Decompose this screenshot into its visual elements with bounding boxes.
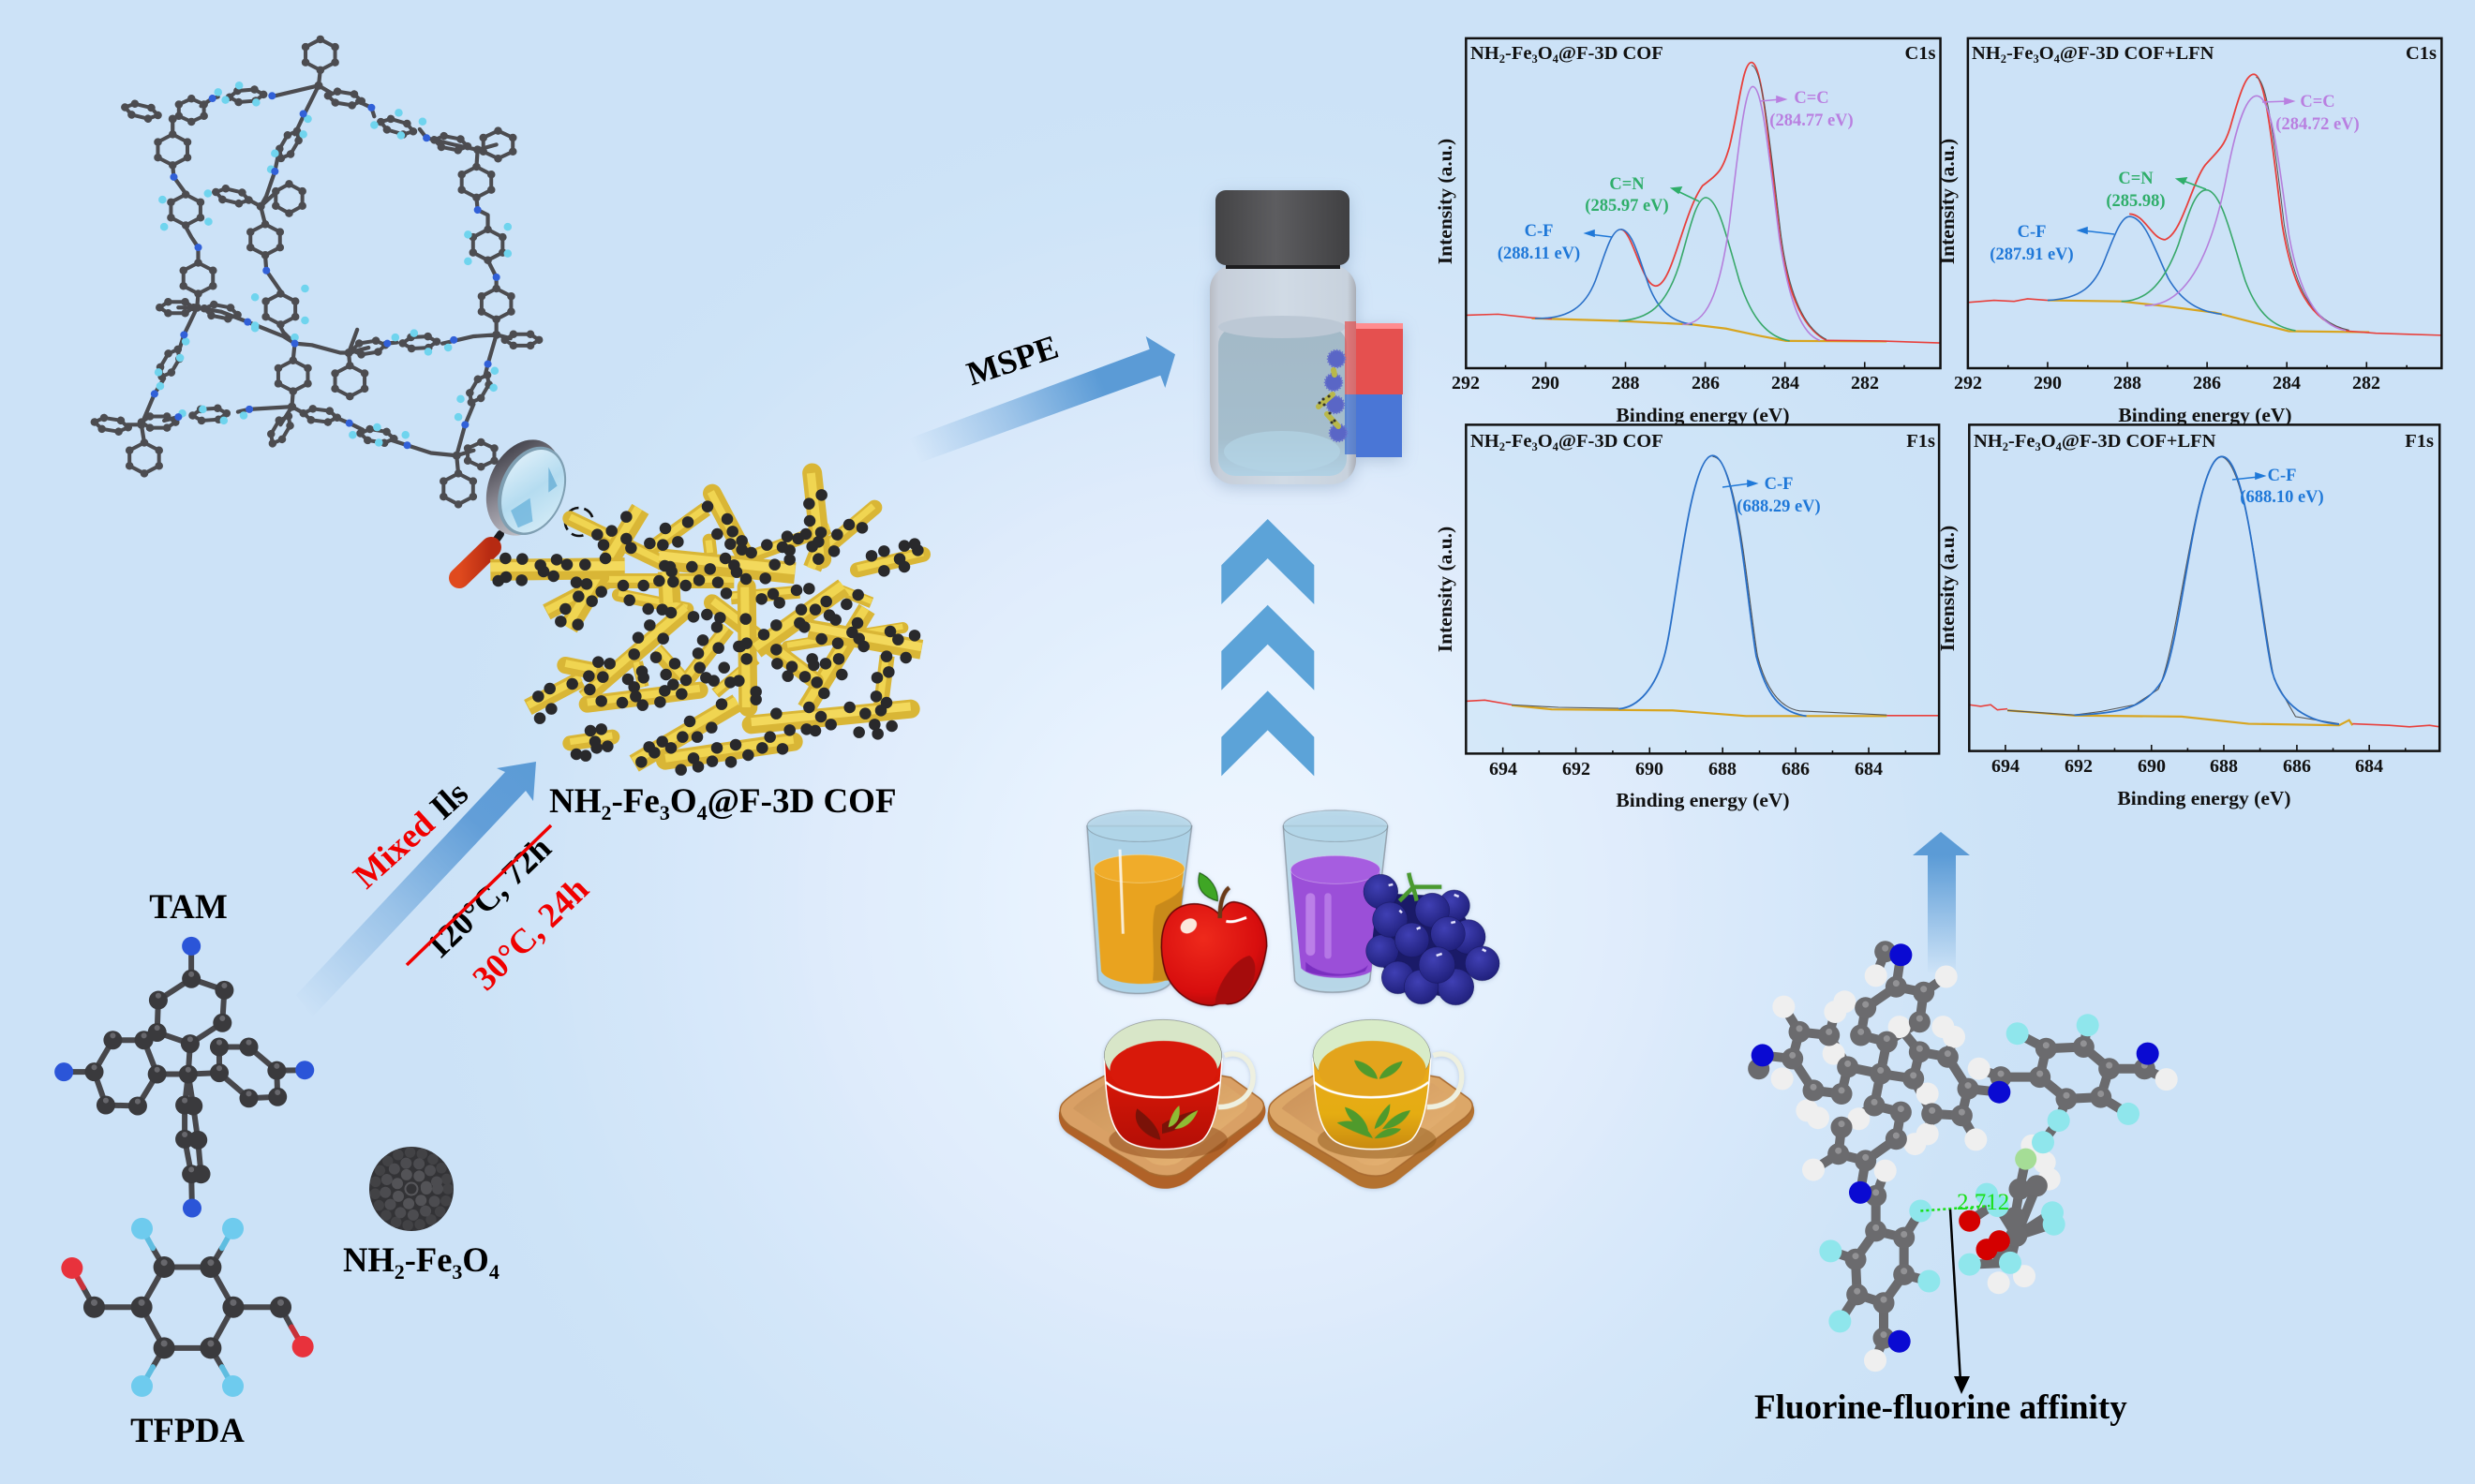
peak arrows (2079, 98, 2293, 234)
title: NH2-Fe3O4@F-3D COF label: 4 (697, 801, 708, 824)
chart text: @F-3D COF (1558, 431, 1663, 452)
chart text: (287.91 eV) (1990, 245, 2074, 264)
chart text: 282 (2352, 373, 2380, 393)
chart text (1434, 43, 1936, 426)
molecule: TAM (64, 946, 305, 1209)
title: NH2-Fe3O4@F-3D COF label: 3 (660, 801, 670, 824)
chart text: 284 (1771, 373, 1799, 393)
chart text: (688.29 eV) (1737, 497, 1821, 516)
chart text: 686 (1782, 759, 1810, 779)
title: NH2-Fe3O4@F-3D COF label: O (670, 782, 697, 821)
chart text: 694 (1991, 756, 2020, 777)
dashed zoom circle (565, 508, 593, 536)
panel: magnetic vial (1210, 190, 1403, 484)
chart text: O (1538, 43, 1553, 64)
chart text: 2 (2001, 52, 2006, 66)
chart text: 688 (1708, 759, 1737, 779)
label: NH2-Fe3O4: 3 (452, 1260, 462, 1284)
chart text: C=N (2118, 170, 2154, 188)
chart text: (285.97 eV) (1585, 197, 1669, 215)
chart text: @F-3D COF+LFN (2060, 43, 2214, 64)
chart text: 292 (1452, 373, 1480, 393)
chart text: (688.10 eV) (2240, 488, 2324, 507)
chart text: Binding energy (eV) (1616, 404, 1790, 426)
icon: apple (1161, 873, 1267, 1005)
title: Fluorine-fluorine affinity: Fluorine-fluorine affinity (1754, 1388, 2127, 1427)
peak arrow (2232, 473, 2264, 480)
molecule: TFPDA (72, 1228, 303, 1387)
chart text: C1s (2406, 43, 2437, 64)
chart text: F1s (2405, 431, 2434, 452)
chart text: @F-3D COF+LFN (2062, 431, 2216, 452)
arrow: synthesis (296, 762, 536, 1017)
chart text: -Fe (1505, 431, 1531, 452)
chart text: (288.11 eV) (1498, 245, 1580, 263)
chart text: C-F (1765, 475, 1793, 494)
chart text: C-F (2018, 223, 2046, 242)
chart text: @F-3D COF (1558, 43, 1663, 64)
chart text: C=C (2300, 93, 2335, 111)
bonds (1759, 952, 2167, 1360)
text: MSPE: MSPE (962, 328, 1063, 393)
chart text: 284 (2273, 373, 2301, 393)
text: Mixed ILs: Mixed Ils (347, 774, 476, 897)
chart text: -Fe (1505, 43, 1531, 64)
chart text: 3 (1531, 440, 1538, 453)
chart text: NH (1470, 43, 1499, 64)
text: old conditions struck through: 120°C, 72h (419, 829, 559, 966)
chart text: Intensity (a.u.) (1434, 139, 1456, 264)
title: NH2-Fe3O4@F-3D COF label: NH (549, 782, 602, 821)
chart text: 692 (1562, 759, 1590, 779)
chart text: O (2041, 431, 2056, 452)
chart text: (285.98) (2106, 192, 2166, 211)
chart text: 290 (2034, 373, 2062, 393)
chart text: Binding energy (eV) (1616, 789, 1790, 811)
chart text: Intensity (a.u.) (1936, 139, 1959, 264)
chart text: C1s (1904, 43, 1936, 64)
chart text: 3 (2035, 440, 2041, 453)
chart text: -Fe (2006, 43, 2033, 64)
molecule: fluorine-fluorine interaction model (1759, 948, 2167, 1360)
chart text: (284.72 eV) (2275, 115, 2360, 134)
chart text: 288 (1612, 373, 1640, 393)
panel: yellow COF rods with Fe3O4 particles (490, 473, 923, 770)
chart frame and curves (1466, 38, 1941, 368)
text: F-F distance value: 2.712 (1957, 1190, 2009, 1215)
arrow: MSPE (900, 336, 1175, 470)
label: NH2-Fe3O4: -Fe (405, 1240, 452, 1279)
chart text: 684 (1855, 759, 1883, 779)
chart text: 686 (2283, 756, 2311, 777)
icon: juice glass (1087, 810, 1192, 993)
chart text (1936, 43, 2437, 426)
carbon atoms (1759, 952, 2144, 1338)
vial body (1210, 265, 1356, 484)
icon: Fe3O4 nanoparticle (369, 1147, 454, 1231)
panel: XPS C1s chart 2 (1936, 38, 2441, 426)
arrows: three upward chevrons (1221, 519, 1314, 776)
chart text: 690 (2138, 756, 2166, 777)
label: TFPDA: TFPDA (130, 1411, 245, 1449)
chart text: 2 (2003, 440, 2008, 453)
chart text: (284.77 eV) (1769, 111, 1854, 130)
chart text: 4 (2056, 440, 2063, 453)
chart text: Binding energy (eV) (2118, 404, 2292, 426)
panel: 3D COF framework structure (94, 39, 539, 504)
chart text: C=N (1609, 175, 1645, 194)
chart text (1434, 431, 1935, 811)
icon: green tea cup (1268, 1019, 1474, 1189)
chart text: 692 (2065, 756, 2093, 777)
chart text: 288 (2113, 373, 2141, 393)
icon: grape juice glass (1283, 810, 1388, 992)
arrow: to fluorine-fluorine affinity (1950, 1209, 1970, 1394)
chart text: 2 (1499, 52, 1505, 66)
chart text: 2 (1499, 440, 1505, 453)
icon: black tea cup (1059, 1019, 1265, 1189)
chart text: NH (1470, 431, 1499, 452)
chart text: 3 (2033, 52, 2039, 66)
icon: grapes (1364, 873, 1499, 1005)
Fe3O4 particles (499, 495, 917, 770)
arrow: up to XPS charts (1913, 832, 1970, 974)
chart text: 4 (2054, 52, 2061, 66)
chart text (1936, 431, 2434, 809)
title: NH2-Fe3O4@F-3D COF label: @F-3D COF (708, 782, 897, 821)
fluorine atoms (1830, 1025, 2128, 1321)
chart text: 290 (1531, 373, 1559, 393)
panel: XPS F1s chart 3 (1434, 424, 1939, 811)
rods (490, 473, 923, 764)
peak arrows (1586, 96, 1785, 237)
label: NH2-Fe3O4: NH (343, 1240, 395, 1279)
chart frame and curves (1969, 424, 2439, 751)
panel: XPS F1s chart 4 (1936, 424, 2439, 809)
chart text: Binding energy (eV) (2117, 787, 2291, 809)
chart text: 292 (1954, 373, 1982, 393)
label: NH2-Fe3O4: 4 (489, 1260, 499, 1284)
chart text: NH (1974, 431, 2003, 452)
peak arrow (1722, 481, 1756, 487)
chart text: 4 (1553, 52, 1559, 66)
chart text: Intensity (a.u.) (1936, 526, 1959, 651)
label: NH2-Fe3O4: 2 (395, 1260, 405, 1284)
panel: XPS C1s chart 1 (1434, 38, 1941, 426)
text: new conditions: 30°C, 24h (466, 869, 597, 998)
chart text: F1s (1906, 431, 1935, 452)
chart text: C=C (1794, 89, 1829, 108)
chart text: 286 (2193, 373, 2221, 393)
chart text: Intensity (a.u.) (1434, 527, 1456, 652)
hydrogen atoms (1782, 975, 2167, 1360)
label: NH2-Fe3O4: O (462, 1240, 489, 1279)
nitrogen atoms (1763, 955, 2148, 1342)
title: NH2-Fe3O4@F-3D COF label: -Fe (611, 782, 660, 821)
chart text: C-F (1525, 222, 1553, 241)
magnet (1356, 323, 1403, 394)
chart text: -Fe (2008, 431, 2035, 452)
chart text: NH (1972, 43, 2001, 64)
chart frame and curves (1968, 38, 2441, 368)
magnetic particles (1325, 350, 1347, 441)
label: TAM: TAM (149, 888, 228, 927)
chart text: 684 (2355, 756, 2383, 777)
chart text: 282 (1851, 373, 1879, 393)
oxygen atoms (1970, 1221, 1999, 1250)
panel: food samples (1059, 810, 1499, 1189)
chart frame and curves (1466, 424, 1939, 753)
dashed F-F contact (1920, 1206, 1990, 1210)
chart text: 688 (2210, 756, 2238, 777)
chart text: O (2039, 43, 2054, 64)
cap (1226, 260, 1340, 269)
icon: magnifying glass (459, 428, 580, 578)
chart text: O (1538, 431, 1553, 452)
chart text: 4 (1553, 440, 1559, 453)
chart text: 694 (1489, 759, 1517, 779)
chart text: 690 (1635, 759, 1663, 779)
chart text: C-F (2268, 467, 2296, 485)
chart text: 3 (1531, 52, 1538, 66)
chart text: 286 (1692, 373, 1720, 393)
title: NH2-Fe3O4@F-3D COF label: 2 (602, 801, 611, 824)
